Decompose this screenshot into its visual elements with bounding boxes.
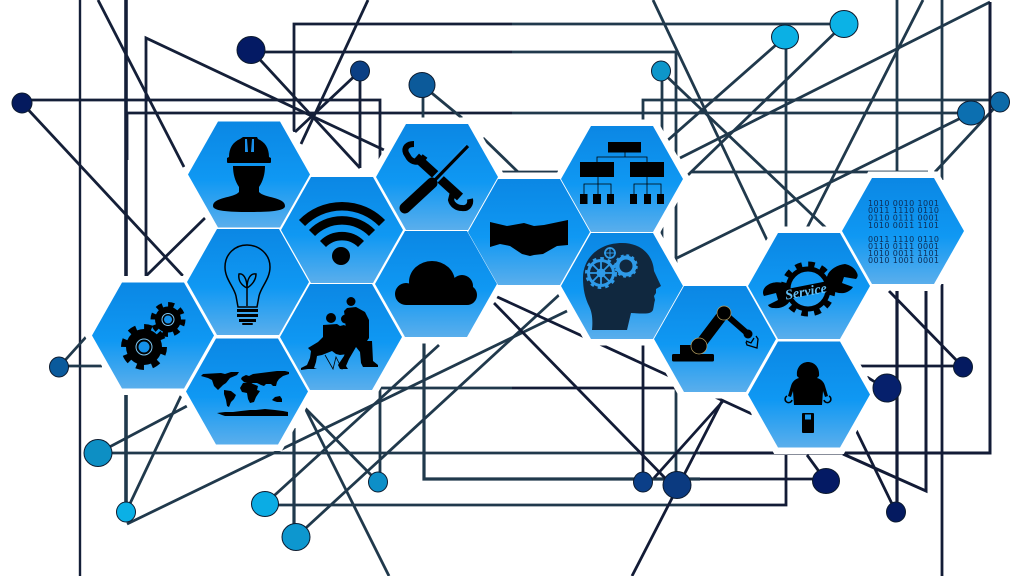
hexagon: binary code: 0010 1001 0001 (868, 256, 939, 265)
hexagon: construction worker (188, 122, 310, 228)
hexagon: wifi signal (281, 177, 403, 283)
hexagon: binary code: 0110 0111 0001 (868, 214, 939, 222)
hexagon: wrench and screwdriver (376, 124, 498, 230)
hexagon: robot arm (654, 286, 776, 392)
hexagon: handshake (468, 179, 590, 285)
hexagon: binary code: 0011 1110 0110 (868, 235, 939, 244)
hexagon: service gear and wrench: Service (784, 281, 828, 304)
hexagon: binary code (842, 178, 964, 284)
hexagon: binary code: 0011 1110 0110 (868, 206, 939, 215)
hexagon: world map (186, 338, 308, 444)
hexagon: head with gears (561, 233, 683, 339)
hexagon: cloud (375, 231, 497, 337)
hexagon: binary code: 1010 0011 1101 (868, 221, 939, 230)
hexagon: cogwheels (92, 282, 214, 388)
hexagon: group of people (280, 284, 402, 390)
hexagon: organisation chart (561, 126, 683, 232)
hexagon: monowheel rider (748, 342, 870, 448)
white halo behind hexagons (92, 122, 964, 448)
hexagon: light bulb (187, 229, 309, 335)
hexagon: binary code: 0110 0111 0001 (868, 242, 939, 251)
hexagon: service gear and wrench (748, 233, 870, 339)
hexagon: binary code: 1010 0010 1001 (868, 199, 939, 208)
hexagon: binary code: 1010 0011 1101 (868, 249, 939, 258)
